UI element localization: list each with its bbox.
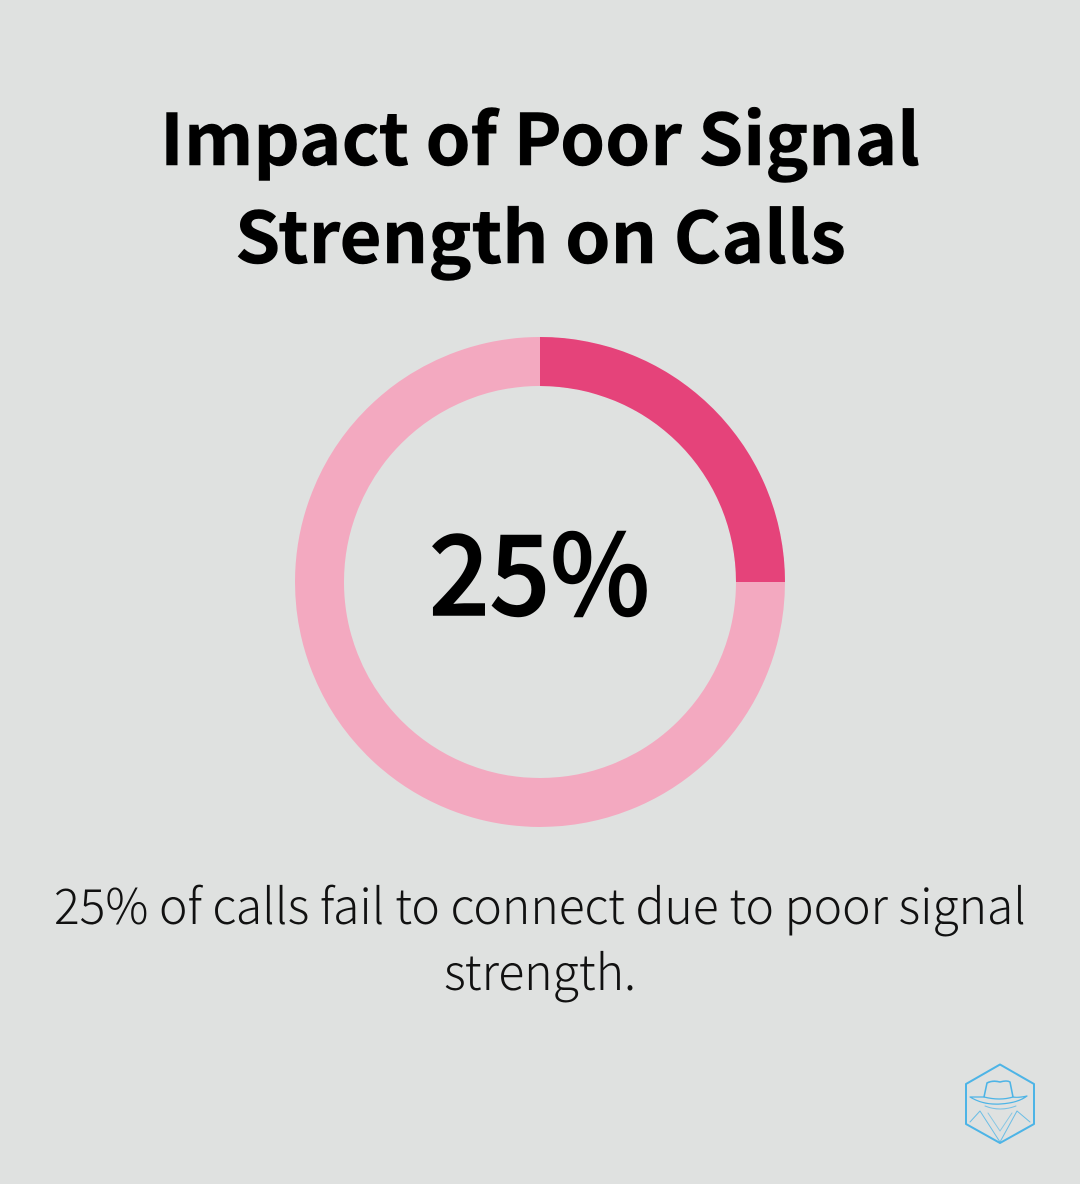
donut chart: 25% bbox=[320, 337, 785, 802]
title: Strength on Calls bbox=[235, 182, 846, 284]
title bbox=[160, 84, 920, 284]
icon: logo spy in hexagon bbox=[966, 1064, 1034, 1143]
description text: strength. bbox=[444, 934, 636, 1005]
description text bbox=[54, 868, 1026, 1005]
description text: 25% of calls fail to connect due to poor signal bbox=[54, 868, 1026, 939]
center value: 25% bbox=[429, 486, 650, 647]
title: Impact of Poor Signal bbox=[160, 84, 920, 186]
